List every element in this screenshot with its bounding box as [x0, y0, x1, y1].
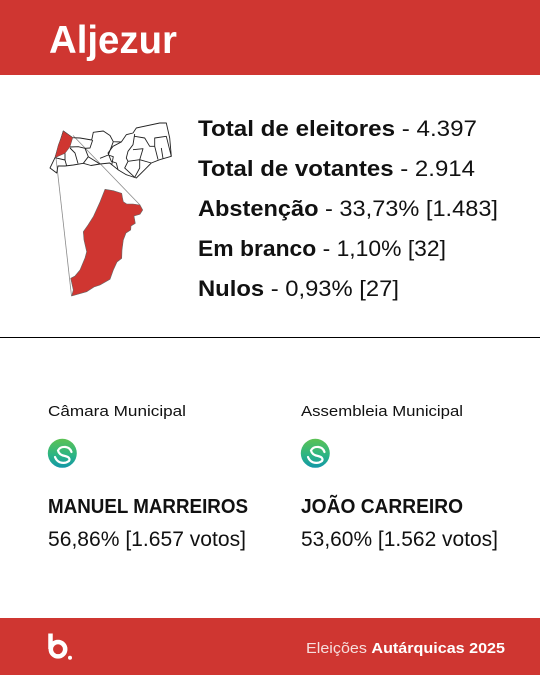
panel: Assembleia Municipal: [301, 403, 498, 551]
icon: party logo: [48, 439, 77, 468]
candidate name: MANUEL MARREIROS: [48, 496, 248, 518]
title: Aljezur: [49, 19, 177, 62]
total voters: Total de eleitores - 4.397: [198, 116, 477, 141]
header banner: [0, 0, 540, 75]
icon: brand logo: [50, 634, 72, 660]
Aljezur on small map: [55, 131, 73, 158]
blank votes: Em branco - 1,10% [32]: [198, 236, 446, 261]
panel heading: Assembleia Municipal: [301, 403, 463, 420]
icon: party logo: [301, 439, 330, 468]
map of the Algarve with Aljezur highlighted: [50, 123, 171, 296]
panel heading: Câmara Municipal: [48, 403, 186, 420]
statistics list: [198, 116, 498, 301]
candidate result: 56,86% [1.657 votos]: [48, 528, 246, 551]
Aljezur enlarged: [71, 189, 143, 296]
footer label: Eleições Autárquicas 2025: [306, 640, 505, 657]
connector lines: [56, 136, 140, 296]
panel: Câmara Municipal: [48, 403, 248, 551]
total votes cast: Total de votantes - 2.914: [198, 156, 475, 181]
small regional map: [50, 123, 171, 178]
abstention: Abstenção - 33,73% [1.483]: [198, 196, 498, 221]
null votes: Nulos - 0,93% [27]: [198, 276, 399, 301]
footer banner: [0, 618, 540, 675]
candidate result: 53,60% [1.562 votos]: [301, 528, 498, 551]
candidate name: JOÃO CARREIRO: [301, 495, 463, 518]
